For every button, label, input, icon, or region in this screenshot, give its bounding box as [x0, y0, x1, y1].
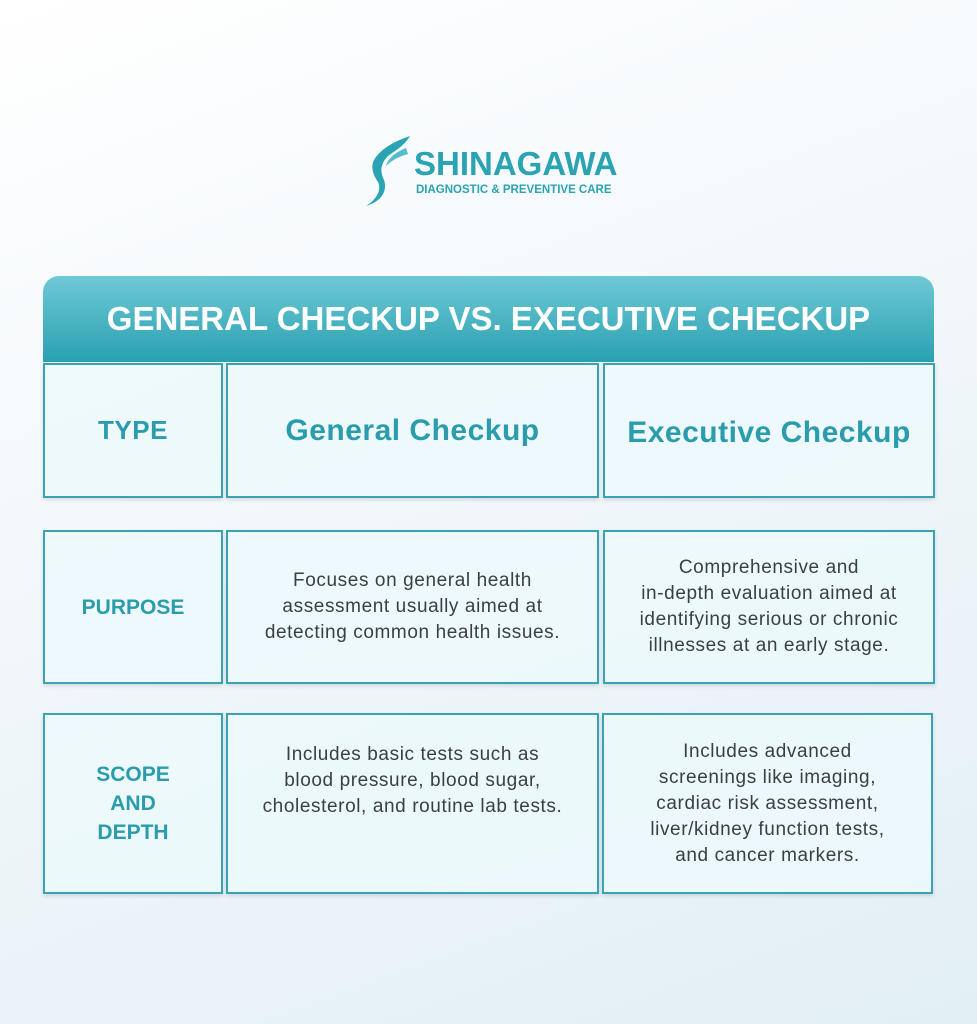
title banner: GENERAL CHECKUP VS. EXECUTIVE CHECKUP — [107, 300, 870, 337]
cell: general purpose — [226, 530, 599, 684]
cell: scope label: DEPTH — [97, 821, 169, 844]
cell: general scope: cholesterol, and routine lab tests. — [263, 796, 562, 817]
cell: type label — [43, 363, 223, 498]
cell: general scope — [226, 713, 599, 894]
cell: general purpose: Focuses on general health — [293, 570, 532, 591]
cell: general checkup header: General Checkup — [285, 414, 540, 446]
cell: executive purpose: in-depth evaluation aimed at — [641, 583, 897, 604]
icon: wing — [366, 136, 410, 206]
cell: general scope: Includes basic tests such as — [286, 744, 539, 765]
cell: general purpose: assessment usually aimed at — [282, 596, 543, 617]
cell: executive purpose: Comprehensive and — [679, 557, 859, 578]
logo — [366, 136, 618, 206]
cell: type label: TYPE — [98, 415, 168, 445]
cell: executive purpose: illnesses at an early stage. — [649, 635, 889, 656]
cell: executive checkup header: Executive Checkup — [627, 416, 911, 448]
cell: executive scope: Includes advanced — [683, 740, 852, 762]
cell: scope label — [43, 713, 223, 894]
brand name: SHINAGAWA — [414, 145, 618, 182]
cell: scope label: SCOPE — [96, 763, 170, 786]
title banner — [43, 276, 934, 362]
cell: executive purpose — [603, 530, 935, 684]
cell: general scope: blood pressure, blood sugar, — [284, 770, 541, 791]
cell: executive checkup header — [603, 363, 935, 498]
cell: purpose label — [43, 530, 223, 684]
cell: purpose label: PURPOSE — [82, 596, 184, 618]
cell: executive scope — [602, 713, 933, 894]
cell: executive purpose: identifying serious or chronic — [640, 609, 898, 630]
cell: general purpose: detecting common health issues. — [265, 622, 560, 643]
cell: executive scope: screenings like imaging, — [659, 766, 876, 788]
cell: general checkup header — [226, 363, 599, 498]
cell: executive scope: liver/kidney function tests, — [650, 818, 885, 840]
tagline: DIAGNOSTIC & PREVENTIVE CARE — [416, 184, 612, 196]
cell: executive scope: and cancer markers. — [675, 844, 860, 866]
cell: executive scope: cardiac risk assessment, — [656, 792, 879, 814]
cell: scope label: AND — [110, 792, 156, 815]
